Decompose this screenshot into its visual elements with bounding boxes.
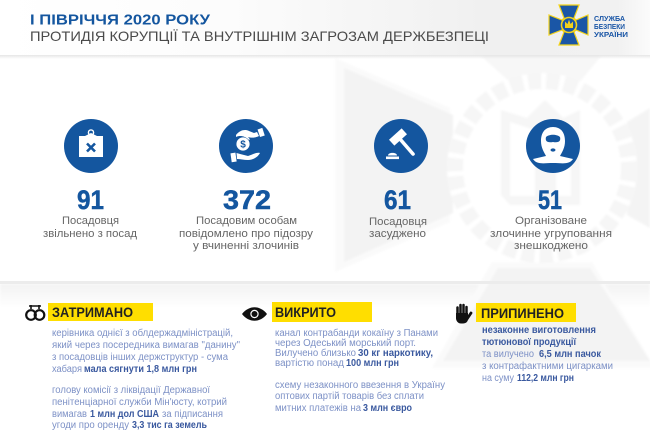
text block: second detention: голову комісії з ліквідації Державної [52,385,210,396]
stat: organised crime group [490,119,612,252]
stat: convicted officials: Посадовця [369,216,427,228]
text block: cocaine smuggling: через Одеський морський порт. [275,338,416,349]
stat: convicted officials: 61 [384,185,411,215]
text block: second detention: 3,3 тис га земель [132,420,207,431]
icon: balaclava [526,119,580,173]
panel: stopped [456,303,613,384]
text block: illegal imports [275,380,445,414]
stat: notified of suspicion: у вчиненні злочинів [193,240,299,252]
heading: stopped [476,303,576,322]
heading: exposed [272,302,372,322]
stat: notified of suspicion: 372 [223,185,271,215]
header band [0,0,650,59]
text block: cocaine smuggling: Вилучено близько [275,347,356,359]
stat: organised crime group: злочинне угруповання [490,228,612,240]
stat: dismissed officials: 91 [77,185,104,215]
text block: tobacco production: 6,5 млн пачок [539,349,602,360]
stat: dismissed officials: Посадовця [62,215,119,227]
text block: second detention: вимагав [52,409,87,420]
logo: security service emblem: СЛУЖБА [594,14,625,23]
text block: illegal imports: оптових партій товарів без сплати [275,390,424,402]
text block: cocaine smuggling: 30 кг наркотику, [358,348,433,359]
text block: first detention: який через посередника вимагав "данину" [52,340,240,351]
text block: tobacco production: та вилучено [482,349,534,360]
text block: first detention: хабаря [52,363,82,375]
text block: second detention: угоди про оренду [52,420,129,431]
text block: cocaine smuggling: 100 млн грн [346,358,399,369]
text block: second detention [52,385,227,431]
stat: notified of suspicion: Посадовим особам [196,215,297,227]
icon: sign with cross [64,119,118,173]
panel: detained [26,303,240,431]
text block: first detention [52,327,240,375]
text block: cocaine smuggling: вартістю понад [275,358,344,369]
text block: second detention: пенітенціарної служби Мін'юсту, котрий [52,396,227,408]
text block: cocaine smuggling [275,327,438,369]
stat: dismissed officials [43,119,137,240]
text block: tobacco production: тютюнової продукції [482,337,576,348]
title: ПРОТИДІЯ КОРУПЦІЇ ТА ВНУТРІШНІМ ЗАГРОЗАМ ДЕРЖБЕЗПЕЦІ [30,28,489,44]
stat: convicted officials: засуджено [369,228,426,240]
background watermark emblem [0,55,650,368]
text block: tobacco production: на суму [482,373,514,384]
stat: notified of suspicion: повідомлено про підозру [179,228,313,240]
heading: stopped: ПРИПИНЕНО [481,306,564,321]
stat: notified of suspicion [179,119,313,252]
text block: illegal imports: 3 млн євро [363,403,412,414]
text block: illegal imports: схему незаконного ввезення в Україну [275,380,445,391]
panel: exposed [242,302,445,414]
text block: illegal imports: митних платежів на [275,403,361,414]
icon: stop hand [456,305,471,324]
icon: gavel [374,119,428,173]
text block: tobacco production [482,325,613,384]
icon: eye [242,307,267,321]
stat: organised crime group: Організоване [515,215,587,227]
logo: security service emblem [549,5,628,45]
icon: hands with coin: $ [240,140,246,150]
title: І ПІВРІЧЧЯ 2020 РОКУ [30,12,211,28]
heading: exposed: ВИКРИТО [275,305,336,320]
text block: tobacco production: незаконне виготовлення [482,325,596,336]
text block: second detention: за підписання [162,409,223,420]
text block: first detention: з посадовців інших держструктур - сума [52,352,228,363]
text block: tobacco production: з контрафактними цигарками [482,360,613,372]
logo: security service emblem: БЕЗПЕКИ [594,22,625,31]
text block: tobacco production: 112,2 млн грн [517,373,574,384]
divider band [0,281,650,284]
stat: organised crime group: 51 [538,185,562,215]
title [30,12,489,44]
stat: organised crime group: знешкоджено [514,240,588,252]
icon: handcuffs [26,305,44,320]
text block: second detention: 1 млн дол США [90,409,159,420]
text block: cocaine smuggling: канал контрабанди кокаїну з Панами [275,327,438,339]
text block: first detention: керівника однієї з облдержадміністрацій, [52,327,233,339]
stat: dismissed officials: звільнено з посад [43,228,137,240]
logo: security service emblem: УКРАЇНИ [594,30,628,39]
stat: convicted officials [369,119,428,240]
heading: detained: ЗАТРИМАНО [52,305,133,320]
text block: first detention: мала сягнути 1,8 млн грн [84,364,197,375]
heading: detained [48,303,153,321]
